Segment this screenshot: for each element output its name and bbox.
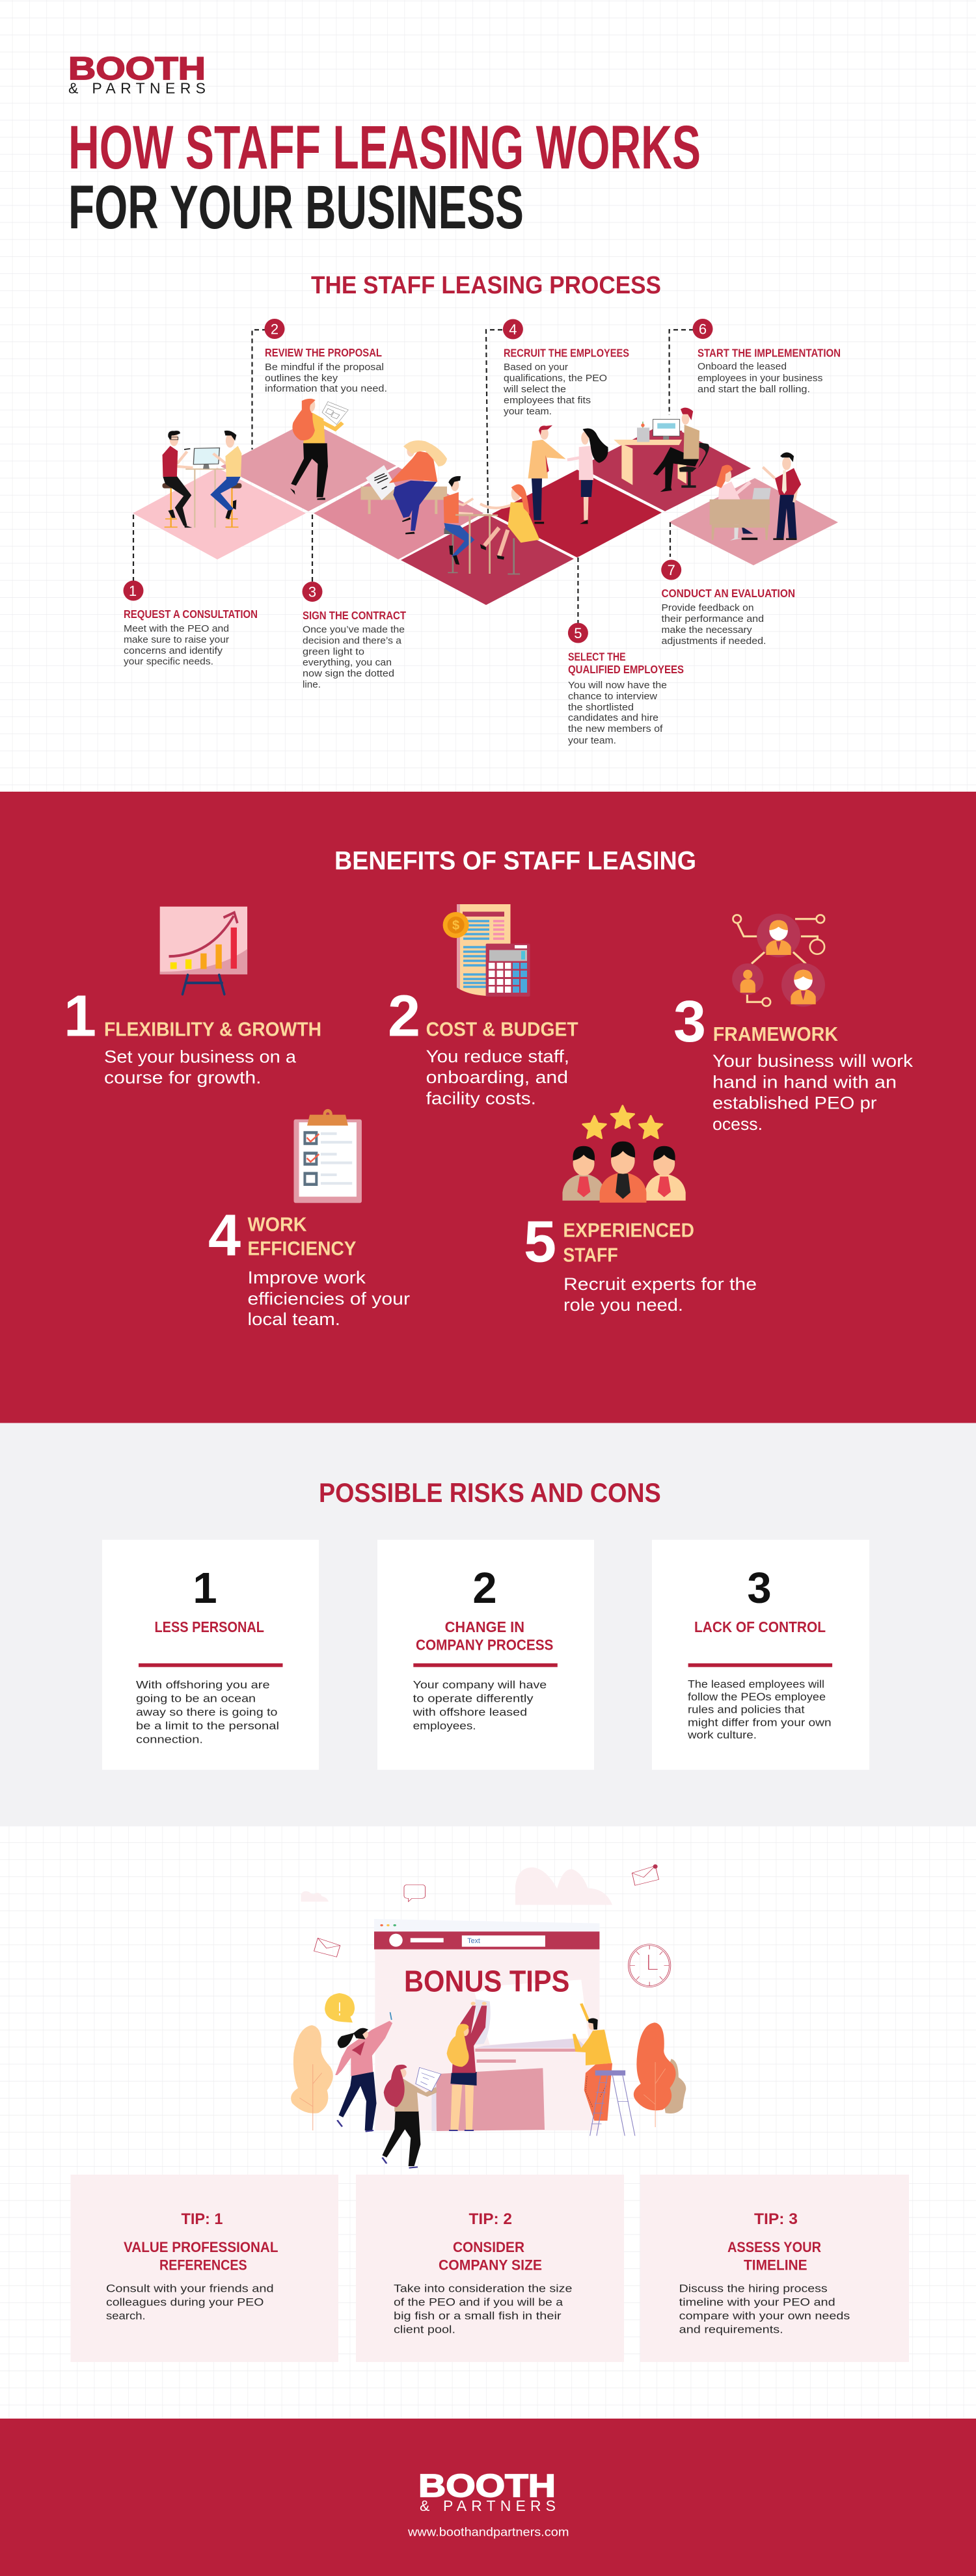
benefit 1: flexibility and growth: 1	[64, 984, 96, 1049]
benefit 4: work efficiency	[208, 1109, 410, 1329]
icon: speech bubble	[404, 1885, 426, 1901]
benefit 5: experienced staff: 5	[524, 1210, 556, 1275]
step 7: conduct an evaluation: adjustments if needed.	[661, 636, 766, 647]
woman with ponytail and pink hoodie	[335, 2012, 392, 2132]
woman with blonde hair raising arms	[447, 2002, 487, 2130]
benefit 3: framework: 3	[673, 989, 706, 1054]
step 3: sign the contract: Once you’ve made the	[303, 624, 405, 635]
step 1: request a consultation	[124, 515, 258, 667]
title	[68, 113, 701, 242]
benefit 4: work efficiency: Improve work	[247, 1268, 366, 1287]
step 6: start the implementation: and start the ball rolling.	[698, 384, 810, 395]
step 5: select the qualified employees: QUALIFIED EMPLOYEES	[568, 663, 684, 676]
panel: tip 2: Take into consideration the size	[394, 2283, 572, 2295]
icon: three staff with stars	[562, 1106, 686, 1203]
benefit 4: work efficiency: efficiencies of your	[247, 1289, 410, 1308]
step 5: select the qualified employees: chance to interview	[568, 691, 657, 702]
logo: footer: & PARTNERS	[420, 2497, 556, 2514]
icon: clipboard checklist	[293, 1109, 362, 1203]
step 1: request a consultation: Meet with the PEO and	[124, 623, 229, 634]
panel: tip 1: TIP: 1	[181, 2210, 223, 2228]
step 1: request a consultation: 1	[129, 583, 137, 599]
panel: tip 1: colleagues during your PEO	[106, 2296, 264, 2308]
step 4: recruit the employees: will select the	[503, 384, 566, 395]
benefit 2: cost and budget: facility costs.	[426, 1089, 536, 1108]
icon: budget sheet with calculator and coin	[443, 904, 530, 997]
panel: tip 2: big fish or a small fish in their	[394, 2310, 562, 2322]
step 5: select the qualified employees: 5	[574, 625, 582, 641]
step 2: review the proposal: Be mindful if the proposal	[265, 362, 384, 373]
panel: bonus tips illustration	[291, 1864, 686, 2168]
risk card 3: lack of control	[652, 1540, 869, 1770]
man shaking hands	[528, 425, 566, 524]
benefit 3: framework: FRAMEWORK	[713, 1023, 839, 1045]
benefit 3: framework: Your business will work	[712, 1051, 914, 1071]
risk card 2: change in company process: to operate differently	[413, 1693, 534, 1705]
panel: benefits of staff leasing	[0, 792, 976, 1423]
step 7: conduct an evaluation	[661, 522, 795, 647]
heading: the staff leasing process: THE STAFF LEASING PROCESS	[311, 272, 661, 299]
benefit 2: cost and budget	[388, 904, 578, 1108]
risk card 3: lack of control: work culture.	[687, 1730, 757, 1741]
seated woman in yellow dress	[455, 485, 539, 574]
clouds	[301, 1868, 612, 1905]
benefit 3: framework: ocess.	[712, 1114, 763, 1134]
risk card 2: change in company process: employees.	[413, 1721, 476, 1732]
step 4: recruit the employees: Based on your	[504, 362, 568, 373]
panel: tip 3	[640, 2175, 909, 2362]
logo: footer	[418, 2469, 556, 2514]
panel: tip 3: TIP: 3	[754, 2210, 798, 2228]
benefit 5: experienced staff: EXPERIENCED	[563, 1219, 694, 1241]
step 3: sign the contract: green light to	[303, 646, 364, 657]
risk card 2: change in company process	[377, 1540, 594, 1770]
heading: risks: POSSIBLE RISKS AND CONS	[319, 1477, 661, 1508]
step 2: review the proposal: 2	[271, 321, 278, 337]
panel: tip 2	[356, 2175, 624, 2362]
step 3: sign the contract: everything, you can	[303, 657, 392, 668]
benefit 5: experienced staff: Recruit experts for the	[563, 1274, 757, 1294]
step 4: recruit the employees: RECRUIT THE EMPLOYEES	[504, 347, 629, 360]
heading: benefits: BENEFITS OF STAFF LEASING	[334, 847, 696, 876]
panel: tip 1: VALUE PROFESSIONAL	[124, 2239, 278, 2255]
risk card 2: change in company process: 2	[472, 1564, 497, 1613]
browser window	[374, 1919, 599, 2131]
icon: presentation board with growth chart	[160, 907, 247, 994]
man with glasses on stool	[163, 431, 193, 528]
risk card 2: change in company process: CHANGE IN	[445, 1618, 524, 1635]
step 1: request a consultation: concerns and identify	[124, 645, 223, 656]
footer	[0, 2419, 976, 2576]
step 4: recruit the employees: your team.	[504, 406, 552, 417]
risk card 1: less personal	[102, 1540, 319, 1770]
step 4: recruit the employees	[486, 319, 629, 514]
benefit 3: framework	[673, 914, 914, 1134]
benefit 1: flexibility and growth	[64, 907, 321, 1088]
risk card 1: less personal: away so there is going to	[136, 1707, 277, 1719]
panel: tip 1	[70, 2175, 338, 2362]
step 5: select the qualified employees: candidates and hire	[568, 712, 658, 723]
benefit 3: framework: established PEO pr	[712, 1093, 877, 1113]
icon: organisation network	[732, 914, 825, 1006]
logo: Booth & Partners: & PARTNERS	[68, 79, 206, 96]
risk card 2: change in company process: with offshore leased	[412, 1707, 527, 1719]
step 5: select the qualified employees: your team.	[568, 735, 616, 746]
step 3: sign the contract: 3	[308, 584, 316, 600]
step 3: sign the contract	[302, 515, 406, 690]
panel: process diagram	[124, 319, 841, 746]
panel: tip 1: search.	[106, 2310, 146, 2322]
risk card 2: change in company process: Your company will have	[413, 1680, 547, 1691]
benefit 5: experienced staff	[524, 1106, 757, 1315]
benefit 4: work efficiency: WORK	[247, 1213, 307, 1236]
step 4: recruit the employees: qualifications, the PEO	[504, 373, 607, 384]
step 7: conduct an evaluation: their performance and	[661, 613, 764, 624]
man in yellow on ladder	[573, 2004, 635, 2136]
step 1: request a consultation: your specific needs.	[124, 656, 213, 667]
risk card 2: change in company process: COMPANY PROCESS	[416, 1637, 553, 1654]
step 3: sign the contract: decision and there’s a	[303, 635, 402, 647]
panel: tip 3: timeline with your PEO and	[679, 2296, 835, 2308]
benefit 1: flexibility and growth: FLEXIBILITY & GROWTH	[104, 1018, 321, 1041]
step 6: start the implementation: 6	[699, 321, 707, 337]
panel: tip 1: REFERENCES	[159, 2257, 247, 2273]
benefit 1: flexibility and growth: Set your business on a	[104, 1047, 297, 1067]
step 7: conduct an evaluation: make the necessary	[661, 624, 752, 636]
illustration: people on the right tiles	[455, 408, 801, 574]
benefit 1: flexibility and growth: course for growth.	[104, 1068, 262, 1088]
woman with pink hair holding paper	[382, 2065, 441, 2168]
logo: footer: BOOTH	[418, 2469, 556, 2504]
tree left	[291, 2025, 333, 2130]
title: FOR YOUR BUSINESS	[68, 173, 524, 242]
risk card 1: less personal: connection.	[136, 1734, 203, 1746]
seated man in orange vest	[444, 476, 498, 574]
woman in yellow holding paper	[290, 399, 348, 500]
risk card 3: lack of control: The leased employees will	[688, 1679, 824, 1691]
man at desk with computer	[614, 408, 709, 492]
table and monitor	[185, 448, 225, 528]
risk card 3: lack of control: 3	[747, 1564, 772, 1613]
man in yellow shirt on stool	[210, 431, 241, 528]
isometric floor tiles	[133, 421, 838, 605]
step 2: review the proposal: REVIEW THE PROPOSAL	[265, 346, 382, 359]
step 4: recruit the employees: 4	[509, 321, 517, 338]
step 7: conduct an evaluation: CONDUCT AN EVALUATION	[661, 587, 795, 600]
benefit 3: framework: hand in hand with an	[712, 1072, 897, 1092]
panel: tip 3: ASSESS YOUR	[727, 2239, 821, 2255]
panel: tip 1: Consult with your friends and	[106, 2283, 274, 2295]
step 5: select the qualified employees: the new members of	[568, 723, 663, 734]
step 6: start the implementation: employees in your business	[698, 373, 822, 384]
step 3: sign the contract: line.	[303, 679, 321, 690]
risk card 3: lack of control: might differ from your own	[688, 1717, 832, 1728]
risk card 3: lack of control: rules and policies that	[688, 1704, 805, 1716]
step 5: select the qualified employees	[568, 557, 684, 746]
panel: tip 3: TIMELINE	[744, 2257, 807, 2273]
benefit 4: work efficiency: local team.	[247, 1309, 340, 1329]
woman at bench signing contract	[360, 440, 447, 534]
panel: tip 3: Discuss the hiring process	[679, 2283, 828, 2295]
benefit 2: cost and budget: You reduce staff,	[426, 1047, 569, 1066]
panel: possible risks and cons	[0, 1423, 976, 1827]
step 6: start the implementation	[670, 319, 841, 415]
man in red shirt standing	[763, 452, 801, 540]
step 5: select the qualified employees: You will now have the	[568, 680, 667, 691]
logo: Booth & Partners	[68, 51, 206, 96]
risk card 1: less personal: With offshoring you are	[136, 1680, 270, 1691]
panel: tip 2: CONSIDER	[453, 2239, 524, 2255]
step 2: review the proposal	[252, 319, 387, 449]
benefit 2: cost and budget: 2	[388, 984, 420, 1049]
woman shaking hands	[567, 428, 608, 524]
logo: Booth & Partners: BOOTH	[68, 51, 206, 87]
panel: tip 2: COMPANY SIZE	[439, 2257, 542, 2273]
icon: yellow alert bubble	[325, 1993, 355, 2022]
illustration: people on the left tiles	[163, 399, 498, 574]
step 2: review the proposal: outlines the key	[265, 373, 338, 384]
website: www.boothandpartners.com	[407, 2525, 569, 2538]
browser window: Text	[467, 1937, 480, 1945]
step 6: start the implementation: START THE IMPLEMENTATION	[698, 347, 841, 360]
step 5: select the qualified employees: SELECT THE	[568, 651, 626, 664]
benefit 2: cost and budget: COST & BUDGET	[426, 1018, 578, 1041]
step 7: conduct an evaluation: Provide feedback on	[661, 602, 753, 613]
risk card 1: less personal: be a limit to the personal	[136, 1721, 279, 1732]
risk card 1: less personal: LESS PERSONAL	[155, 1618, 264, 1635]
panel: tip 2: of the PEO and if you will be a	[394, 2296, 563, 2308]
icon: budget sheet with calculator and coin: $	[452, 919, 459, 933]
panel: tip 3: and requirements.	[679, 2324, 783, 2335]
step 4: recruit the employees: employees that fits	[504, 395, 591, 406]
risk card 3: lack of control: LACK OF CONTROL	[694, 1618, 826, 1635]
benefit 5: experienced staff: role you need.	[563, 1295, 683, 1315]
step 2: review the proposal: information that you need.	[265, 383, 387, 394]
risk card 1: less personal: 1	[193, 1564, 217, 1613]
benefit 4: work efficiency: EFFICIENCY	[247, 1237, 357, 1259]
panel: tip 3: compare with your own needs	[679, 2310, 850, 2322]
icon: clock	[629, 1944, 671, 1987]
tree right	[634, 2022, 686, 2127]
benefit 2: cost and budget: onboarding, and	[426, 1067, 568, 1087]
panel: tip 2: client pool.	[394, 2324, 455, 2335]
step 5: select the qualified employees: the shortlisted	[568, 702, 634, 713]
panel: tip 2: TIP: 2	[468, 2210, 512, 2228]
step 3: sign the contract: now sign the dotted	[303, 668, 394, 679]
woman at desk with laptop	[710, 465, 771, 541]
icon: envelope left	[314, 1938, 340, 1957]
step 1: request a consultation: make sure to raise your	[124, 634, 229, 645]
step 3: sign the contract: SIGN THE CONTRACT	[303, 609, 406, 622]
heading: bonus tips: BONUS TIPS	[404, 1965, 569, 1998]
icon: envelope right	[632, 1864, 658, 1885]
title: HOW STAFF LEASING WORKS	[68, 113, 701, 182]
risk card 1: less personal: going to be an ocean	[136, 1693, 256, 1705]
risk card 3: lack of control: follow the PEOs employee	[688, 1691, 826, 1703]
benefit 4: work efficiency: 4	[208, 1203, 241, 1268]
step 1: request a consultation: REQUEST A CONSULTATION	[124, 608, 258, 621]
benefit 5: experienced staff: STAFF	[563, 1244, 618, 1266]
step 7: conduct an evaluation: 7	[668, 562, 675, 578]
step 6: start the implementation: Onboard the leased	[698, 361, 787, 372]
